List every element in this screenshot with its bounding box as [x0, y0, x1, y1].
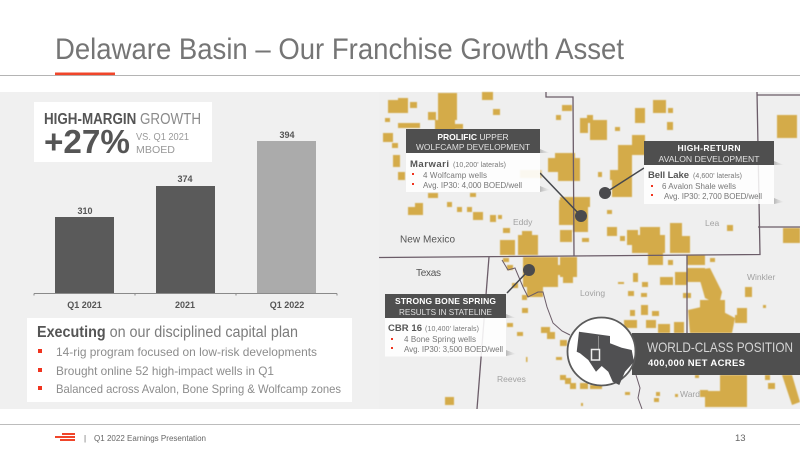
- icon: company logo: [55, 433, 75, 441]
- footer text: Q1 2022 Earnings Presentation: [94, 434, 206, 443]
- map: state labels: New Mexico: [400, 234, 455, 246]
- panel: executing text: Executing on our disciplined capital plan: [37, 324, 298, 341]
- panel: executing text: 14-rig program focused on low-risk developments: [56, 345, 317, 359]
- callout: high-margin growth: MBOED: [136, 144, 175, 156]
- callout: Marwari: Avg. IP30: 4,000 BOED/well: [423, 181, 522, 190]
- callout: Marwari: PROLIFIC UPPER: [437, 132, 509, 142]
- panel: executing text: Balanced across Avalon, Bone Spring & Wolfcamp zones: [56, 382, 341, 396]
- callout: Marwari: 4 Wolfcamp wells: [423, 171, 487, 180]
- map: place labels: Reeves: [497, 374, 526, 384]
- map: place labels: Eddy: [513, 217, 533, 227]
- callout: CBR 16: 4 Bone Spring wells: [404, 335, 476, 344]
- icon: Texas and New Mexico locator: [568, 318, 636, 386]
- callout leader: CBR 16: [507, 264, 535, 293]
- map: state labels: Texas: [416, 268, 441, 279]
- bar chart: 310: [77, 206, 93, 216]
- callout: CBR 16: RESULTS IN STATELINE: [399, 307, 492, 317]
- panel: production growth chart: [0, 92, 379, 409]
- callout: Bell Lake: Bell Lake: [648, 170, 689, 181]
- callout: CBR 16: (10,400' laterals): [425, 326, 479, 333]
- bar chart: Q1 2021: [67, 300, 102, 310]
- callout: CBR 16: STRONG BONE SPRING: [395, 296, 496, 306]
- callout: CBR 16: Avg. IP30: 3,500 BOED/well: [404, 345, 503, 354]
- panel: executing text: Brought online 52 high-impact wells in Q1: [56, 364, 274, 378]
- map: county and state boundaries: [379, 92, 800, 409]
- footer rule: [0, 424, 800, 425]
- callout: Marwari: WOLFCAMP DEVELOPMENT: [416, 142, 530, 152]
- callout: Marwari: Marwari: [410, 159, 449, 170]
- callout: Bell Lake: [644, 141, 784, 204]
- callout: CBR 16: [385, 294, 516, 356]
- bar chart: Q1 2022: [270, 300, 304, 310]
- callout: Bell Lake: Avg. IP30: 2,700 BOED/well: [664, 192, 762, 201]
- callout: Bell Lake: 6 Avalon Shale wells: [662, 182, 736, 191]
- banner: world-class position: [632, 333, 800, 375]
- map: state labels: [400, 234, 455, 279]
- panel: acreage map: [379, 92, 800, 409]
- bar chart: 374: [177, 174, 193, 184]
- footer text: |: [84, 434, 86, 443]
- map: place labels: Winkler: [747, 272, 776, 282]
- map: place labels: [497, 217, 776, 399]
- callout: high-margin growth: VS. Q1 2021: [136, 131, 189, 143]
- callout: Bell Lake: HIGH-RETURN: [678, 143, 740, 153]
- bar chart: [34, 130, 337, 310]
- map: place labels: Loving: [580, 288, 605, 298]
- callout leader: Marwari: [540, 173, 587, 222]
- header rule: [0, 72, 800, 76]
- callout: Marwari: [406, 129, 550, 192]
- callout: high-margin growth: +27%: [44, 123, 130, 160]
- callout leader: Bell Lake: [599, 168, 644, 199]
- panel: executing text: [27, 318, 352, 402]
- bar chart: 394: [279, 130, 295, 140]
- callout: Bell Lake: (4,600' laterals): [693, 173, 742, 180]
- callout: high-margin growth: [34, 102, 212, 162]
- banner: world-class position: 400,000 NET ACRES: [648, 358, 745, 369]
- callout: Marwari: (10,200' laterals): [453, 162, 506, 169]
- map: place labels: Ward: [680, 389, 700, 399]
- callout: Bell Lake: AVALON DEVELOPMENT: [658, 154, 760, 164]
- page number: 13: [735, 433, 746, 444]
- map: acreage blocks: [383, 92, 800, 407]
- callout: CBR 16: CBR 16: [388, 323, 422, 334]
- map: place labels: Lea: [705, 218, 719, 228]
- title: Delaware Basin – Our Franchise Growth Asset: [55, 33, 624, 66]
- bar chart: 2021: [175, 300, 195, 310]
- callout: high-margin growth: HIGH-MARGIN GROWTH: [44, 111, 201, 128]
